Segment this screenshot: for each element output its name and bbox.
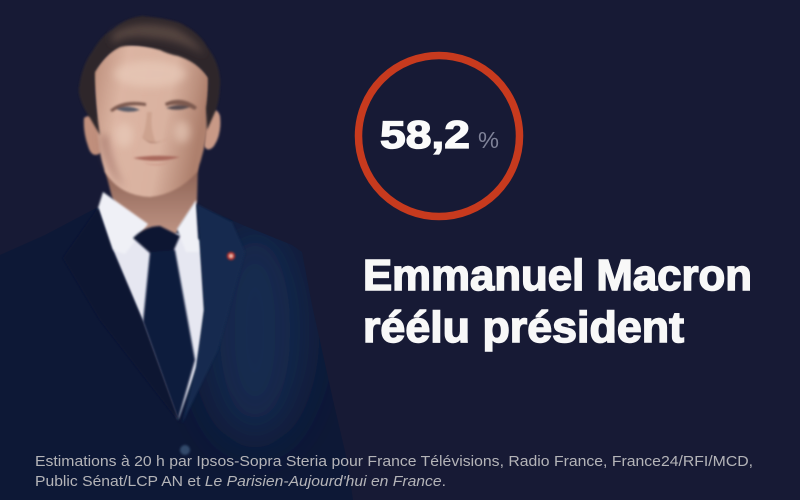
neck	[105, 165, 198, 242]
face	[93, 44, 209, 197]
nose	[143, 138, 168, 143]
percent sign: %	[478, 127, 499, 153]
source line 2: Public Sénat/LCP AN et Le Parisien-Aujourd'hui en France .	[35, 474, 446, 490]
source line 1: Estimations à 20 h par Ipsos-Sopra Steria pour France Télévisions, Radio France, France24/RFI/MCD,	[35, 454, 753, 470]
headline	[363, 251, 752, 352]
source note	[35, 454, 753, 490]
facial features	[110, 100, 197, 165]
lapel pin	[227, 252, 235, 260]
necktie	[133, 226, 195, 420]
headline line 1: Emmanuel Macron	[363, 251, 752, 300]
suit light on right side	[205, 220, 305, 440]
jacket lapels	[63, 204, 245, 424]
value 58,2: 58,2	[380, 114, 470, 157]
nose side shadow	[142, 112, 156, 143]
forehead and cheek light	[114, 61, 190, 147]
shirt collar	[98, 192, 199, 254]
headline line 2: réélu président	[363, 303, 684, 352]
shirt	[113, 225, 204, 420]
eyebrows	[110, 102, 146, 112]
hair	[79, 16, 220, 135]
suit jacket	[0, 200, 360, 500]
portrait of Emmanuel Macron	[0, 16, 360, 500]
result figure	[380, 114, 499, 157]
percentage ring	[358, 56, 520, 216]
jacket button	[180, 445, 190, 455]
ears	[84, 110, 220, 155]
mouth	[133, 156, 180, 161]
hair highlights	[112, 24, 205, 55]
jaw shadow	[100, 135, 125, 188]
eyes	[116, 107, 140, 112]
